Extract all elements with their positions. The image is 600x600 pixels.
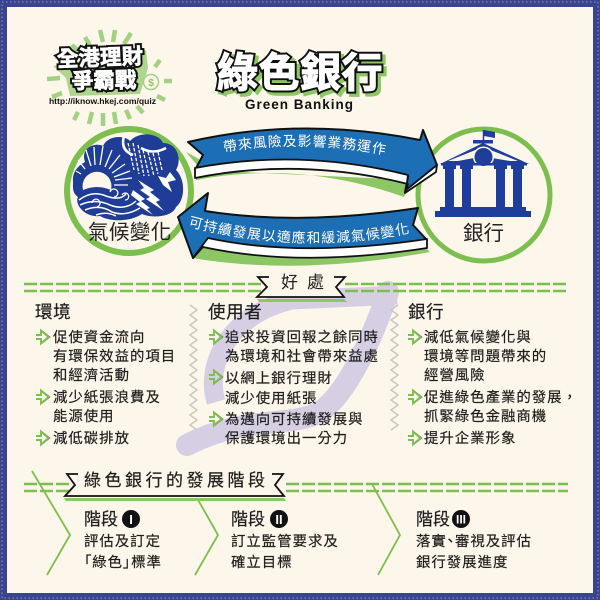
bullet list: 抓緊綠色金融商機	[424, 405, 547, 426]
decorative lavender watermark	[187, 292, 397, 445]
bullet list: 能源使用	[53, 405, 115, 426]
icon: bank	[435, 130, 531, 217]
stage 3: 落實、審視及評估	[416, 530, 532, 551]
title	[217, 39, 386, 102]
stage 1: 評估及訂定	[84, 530, 161, 551]
bullet list: 追求投資回報之餘同時	[225, 326, 379, 347]
arrow text	[224, 146, 392, 156]
benefits ribbon	[257, 299, 347, 302]
arrow: bank to climate: 可持續發展以適應和緩減氣候變化	[190, 216, 409, 244]
stage 1: 階段	[84, 505, 118, 530]
stage 2	[231, 505, 339, 572]
arrow shadow	[196, 170, 412, 197]
stage chevrons	[32, 471, 400, 575]
divider zigzags	[190, 305, 197, 430]
bullet list: 有環保效益的項目	[53, 345, 176, 366]
stages section header	[24, 466, 568, 575]
bullet list: 減少使用紙張	[225, 387, 317, 408]
bullet list: 促進綠色產業的發展，	[424, 386, 578, 407]
arrow body	[188, 128, 437, 192]
bullet list	[408, 326, 578, 448]
bullet list: 提升企業形象	[424, 427, 516, 448]
logo url: http://iknow.hkej.com/quiz	[49, 96, 156, 106]
bullet list: 保護環境出一分力	[225, 427, 348, 448]
arrow white band	[195, 159, 437, 193]
arrow white band	[193, 238, 427, 258]
column: users	[208, 299, 379, 448]
subtitle: Green Banking	[245, 97, 354, 112]
bullet list: 環境等問題帶來的	[424, 345, 547, 366]
logo text: 爭霸戰	[71, 63, 137, 96]
stage 3: 銀行發展進度	[416, 551, 508, 572]
stage 2: 確立目標	[231, 551, 293, 572]
climate circle	[67, 129, 191, 253]
column heading: 環境	[35, 299, 71, 324]
stage 1: 「綠色」標準	[84, 551, 162, 572]
stage number badge: II	[275, 512, 283, 527]
stage number badge: III	[456, 512, 466, 526]
stage 2: 訂立監管要求及	[231, 530, 339, 551]
bullet list: 經營風險	[424, 364, 486, 385]
stage 3	[416, 505, 532, 572]
bank circle	[418, 129, 550, 261]
arrow shadow	[192, 246, 430, 266]
logo text	[56, 40, 144, 96]
logo text: 爭霸戰	[71, 63, 137, 96]
stage 2: 階段	[231, 505, 265, 530]
icon: climate cloud	[73, 134, 183, 220]
bullet list: 促使資金流向	[53, 326, 145, 347]
bank label: 銀行	[463, 216, 504, 246]
stages dashed rule	[24, 484, 568, 491]
logo sun rays	[47, 30, 172, 126]
arrow: climate to bank	[186, 128, 438, 197]
stages title: 綠色銀行的發展階段	[84, 466, 268, 491]
bullet list	[36, 326, 176, 448]
benefits title: 好處	[281, 268, 333, 293]
bullet list: 為邁向可持續發展與	[225, 408, 364, 429]
bullet list: 減低碳排放	[53, 427, 130, 448]
bullet list: 以網上銀行理財	[225, 367, 333, 388]
stage 1	[84, 505, 162, 572]
column: banks	[408, 299, 578, 448]
title shadow: 綠色銀行	[220, 42, 386, 102]
column heading: 銀行	[408, 299, 444, 324]
logo green backing	[53, 50, 148, 96]
benefits dashed rule	[24, 284, 568, 291]
title outline: 綠色銀行	[217, 39, 383, 99]
logo dollar bulb: $	[148, 78, 154, 89]
arrow text	[188, 226, 414, 243]
stage number badge: I	[129, 512, 133, 527]
title main: 綠色銀行	[217, 39, 383, 99]
logo text: 全港理財	[56, 40, 144, 73]
climate label: 氣候變化	[88, 215, 172, 245]
bullet list	[209, 326, 379, 448]
quiz logo	[47, 30, 172, 126]
stage 3: 階段	[416, 505, 450, 530]
column heading: 使用者	[208, 299, 262, 324]
bullet list: 減少紙張浪費及	[53, 386, 161, 407]
bullet list: 減低氣候變化與	[424, 326, 532, 347]
logo text: 全港理財	[56, 40, 144, 73]
arrow: climate to bank: 帶來風險及影響業務運作	[223, 134, 386, 155]
bullet list: 和經濟活動	[53, 364, 130, 385]
column: environment	[35, 299, 176, 448]
benefits section header	[24, 268, 568, 302]
stages ribbon	[64, 498, 286, 501]
arrow body	[178, 193, 427, 258]
arrow: bank to climate	[177, 192, 430, 266]
bullet list: 為環境和社會帶來益處	[225, 345, 379, 366]
